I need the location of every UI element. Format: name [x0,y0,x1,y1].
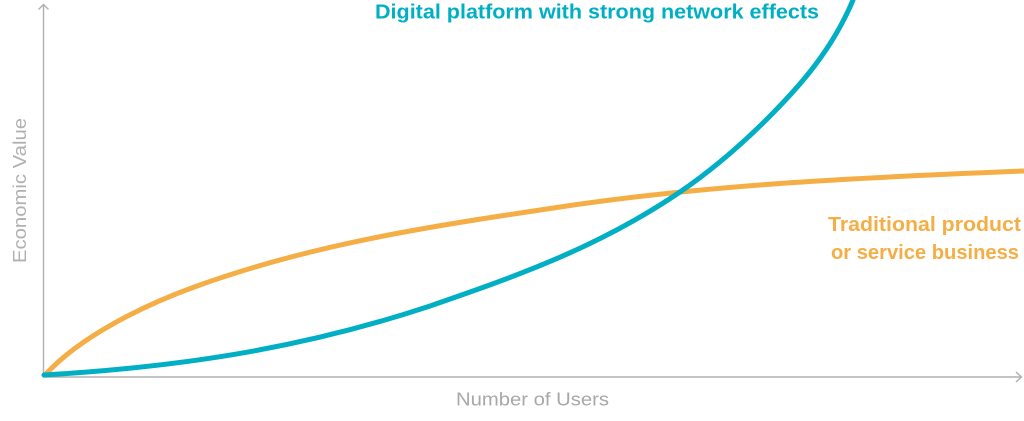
label: traditional product or service business: or service business [831,242,1019,264]
label: traditional product or service business: Traditional product [828,214,1021,236]
curve: traditional product or service business [44,171,1024,376]
label: digital platform: Digital platform with strong network effects [375,2,819,24]
curve: digital platform with strong network effects [44,0,853,375]
x axis with arrow [43,372,1022,382]
y axis label: Economic Value [10,118,30,263]
x axis label: Number of Users [456,390,609,410]
label: traditional product or service business [828,214,1021,264]
y axis with arrow [38,4,48,377]
